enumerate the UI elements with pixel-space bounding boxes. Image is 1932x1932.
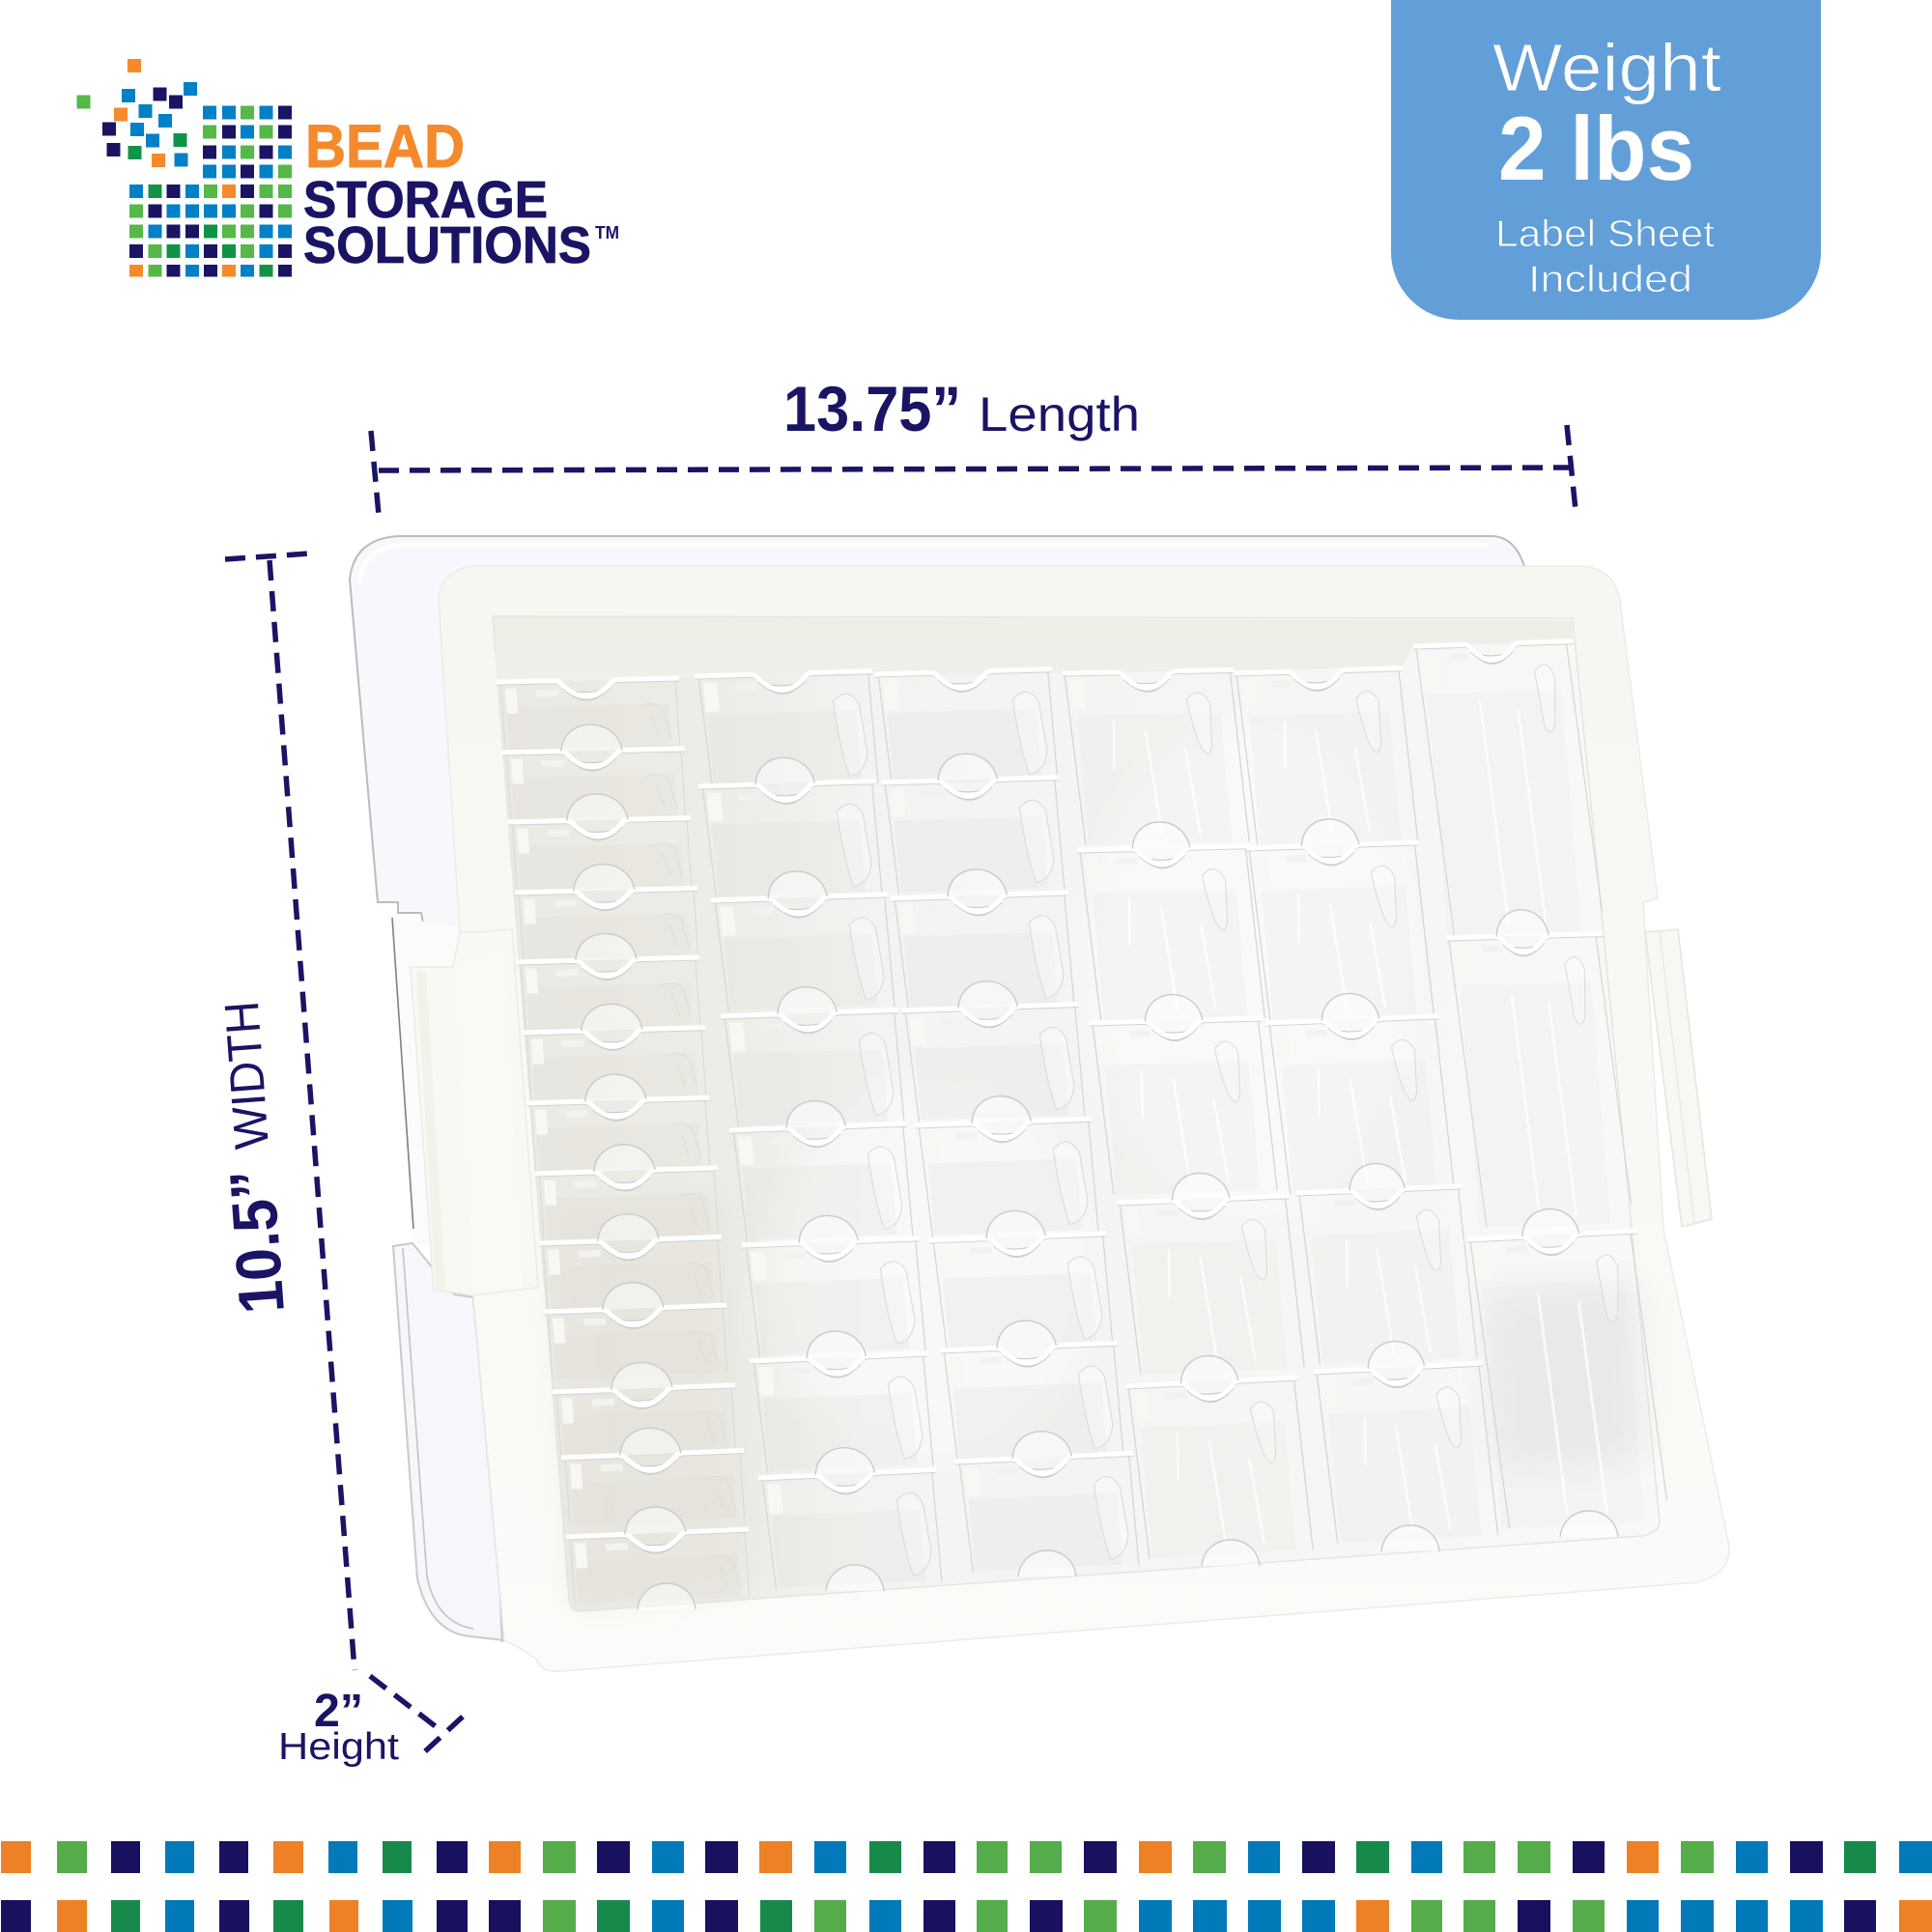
height dimension: 2” [314, 1686, 363, 1737]
weight badge: Weight [1492, 30, 1721, 105]
logo wordmark: TM [595, 223, 619, 242]
length dimension: Length [979, 387, 1140, 441]
column 6: extra-large compartments [1413, 640, 1668, 1537]
column 1: small compartments [497, 678, 753, 1609]
weight badge: Label Sheet [1495, 213, 1715, 255]
height dimension [278, 1676, 463, 1768]
weight badge: Included [1528, 259, 1692, 300]
column 2: medium compartments [695, 671, 946, 1591]
logo wordmark [303, 113, 619, 274]
column 4: large compartments [1062, 669, 1313, 1566]
length dimension: 13.75” [783, 373, 961, 444]
height dimension: Height [278, 1726, 399, 1768]
brand logo [77, 60, 619, 276]
weight badge [1391, 0, 1821, 320]
soft light and shade in window [555, 715, 1642, 1604]
right latch [1645, 929, 1712, 1227]
clear lid behind tray [350, 536, 1526, 1642]
width dimension: WIDTH [214, 1000, 279, 1151]
decorative bead square strip, row 2 [1, 1900, 1932, 1932]
width dimension [214, 554, 355, 1670]
logo: upper square grid [203, 106, 292, 178]
tray inner window [493, 616, 1660, 1611]
column 5: large compartments [1234, 668, 1498, 1551]
left latch [411, 929, 538, 1295]
width dimension: 10.5” [215, 1167, 298, 1316]
weight badge: 2 lbs [1498, 98, 1694, 199]
tray back wall band [495, 618, 1577, 682]
decorative bead square strip, row 1 [1, 1841, 1932, 1873]
logo wordmark: BEAD [305, 113, 465, 181]
logo: lower square grid [129, 185, 292, 276]
logo wordmark: STORAGE [303, 171, 548, 229]
white tray frame [439, 566, 1729, 1671]
column 3: medium compartments [874, 669, 1143, 1577]
logo: scattered squares [77, 60, 197, 166]
product photo: bead storage tray [350, 536, 1729, 1671]
length dimension [371, 373, 1576, 515]
logo wordmark: SOLUTIONS [303, 216, 591, 274]
